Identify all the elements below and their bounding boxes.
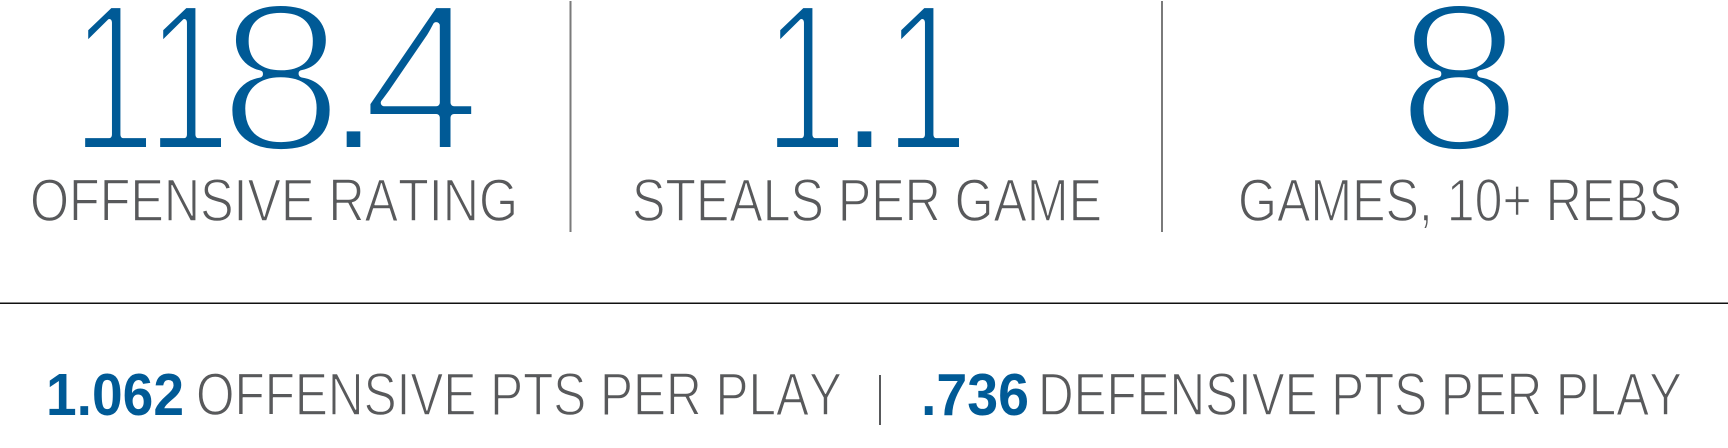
label: steals per game: STEALS PER GAME <box>632 167 1102 234</box>
stat: games with 10+ rebounds <box>1238 0 1682 234</box>
stat: steals per game <box>632 0 1102 234</box>
divider: second <box>1161 1 1163 232</box>
label: offensive rating: OFFENSIVE RATING <box>30 167 518 234</box>
horizontal rule <box>0 302 1728 304</box>
divider: first <box>570 1 572 232</box>
stat line: offensive points per play <box>46 361 842 428</box>
value: 1.062: 1.062 <box>46 362 184 428</box>
stat line: defensive points per play <box>921 361 1682 428</box>
value: .736: .736 <box>921 362 1029 428</box>
stat: offensive rating <box>30 0 518 234</box>
separator <box>879 375 881 425</box>
label: offensive pts per play: OFFENSIVE PTS PER PLAY <box>196 361 842 428</box>
